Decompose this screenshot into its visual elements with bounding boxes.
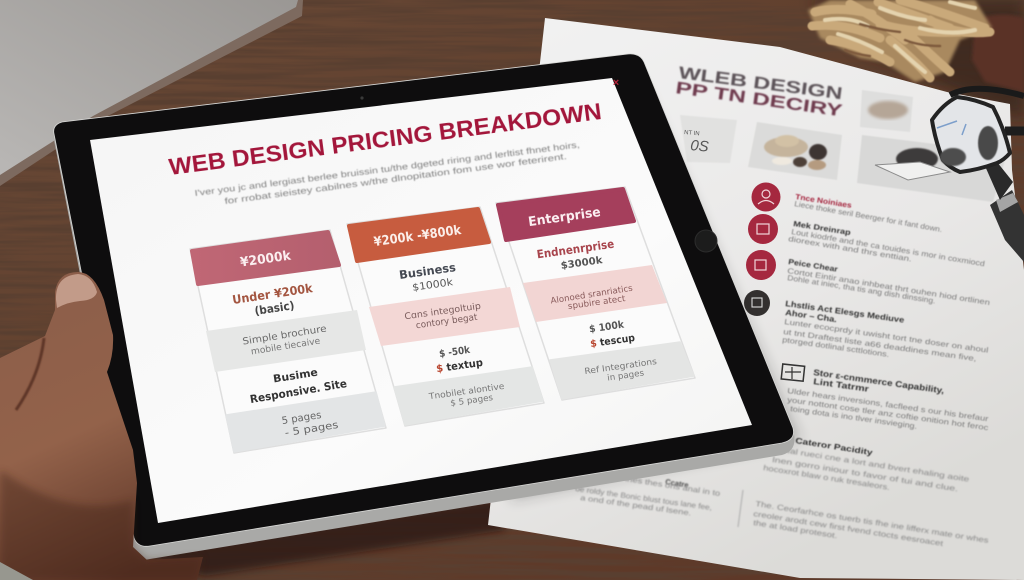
lower paper text: lnes thes ons anal in to [625, 474, 721, 498]
pricing column: enterprise: Endnenrprise [536, 237, 615, 261]
list text: ut tnt Draftest liste a66 deaddines mean five, [783, 327, 977, 363]
shadow beneath the tablet on the desk [135, 498, 505, 576]
list text: ptorged dotlinal scttlotions. [782, 335, 890, 359]
pricing column: enterprise [496, 187, 695, 400]
thumbnail [56, 274, 97, 308]
eyeglasses and pen [932, 89, 1024, 262]
tablet shadow on the paper [510, 80, 800, 500]
pricing column: business: Tnobilet alontive [427, 382, 505, 402]
pricing column: basic: Under ¥200k [231, 281, 314, 307]
tablet camera [360, 96, 364, 100]
pricing column: basic: mobile tiecaive [250, 337, 322, 357]
tablet screen [90, 78, 752, 523]
enterprise header [498, 189, 634, 240]
list text: toing dota is ino tlver insvieging. [790, 404, 918, 431]
list text: Stor ε-cnmmerce Capability, [813, 367, 945, 395]
pricing column: business: ¥200k -¥800k [373, 223, 462, 250]
lower paper text: the at load protesot. [753, 518, 838, 540]
tablet home button [695, 230, 717, 252]
list text: Lhstlis Act Elesgs Mediuve [785, 299, 905, 325]
list text: Dohle at iniec, tha tis ang dish dinssing. [787, 273, 936, 305]
list text: Tnce Noiniaes [795, 192, 852, 210]
pen body [990, 190, 1024, 262]
hand holding the tablet [0, 272, 203, 580]
pricing column: enterprise: $3000k [560, 255, 604, 272]
tablet black bezel [54, 54, 794, 546]
desk photo tile [857, 135, 1007, 202]
subtitle [194, 139, 580, 206]
paper title [674, 63, 844, 120]
pricing column: basic: ¥2000k [239, 249, 292, 271]
dried pampas grass [808, 0, 992, 82]
pricing column: basic [190, 230, 386, 453]
lower paper text: The. Ceorfarhce os tuerb tis fhe ine lifferx mate or whes [755, 499, 990, 545]
lower paper text: lnen gorro iniour to favor of tui and clue. [772, 455, 959, 493]
basic header [192, 232, 339, 284]
lower paper text: Ccatre [665, 477, 689, 490]
shaded lower hand [0, 470, 203, 580]
printed paper document [488, 18, 1024, 580]
lower paper text: a ond of the pead uf lsene. [580, 493, 692, 518]
pricing column: basic: Busime [272, 367, 319, 385]
stat tile: 0S [690, 137, 709, 156]
pricing column: enterprise: $ 100k [589, 320, 625, 335]
list text: Liece thoke seril Beerger for it fant down. [794, 199, 943, 234]
tablet silver rim [54, 60, 794, 560]
pricing column: business: contory begat [415, 313, 479, 331]
thumb crease [16, 338, 44, 410]
list text: Lout kiodrfe and the ca touides is mor in coxmiocd [791, 227, 985, 268]
list text: Lint Tatrmr [813, 376, 870, 394]
pricing column: business: $1000k [412, 277, 454, 294]
pricing column: enterprise: spubire atect [567, 294, 627, 312]
list text: Mek Dreinrap [793, 219, 852, 237]
business header [349, 209, 489, 261]
pricing column: business: $ 5 pages [450, 393, 494, 409]
pricing column: business [347, 207, 544, 426]
lower paper text [575, 446, 990, 548]
lower paper text: oe roldy the Bonic blust tous lane fee, [575, 484, 713, 512]
small photo tile [860, 90, 913, 132]
pricing column: basic: Responsive. Site [249, 377, 348, 406]
pricing column: enterprise: $ tescup [590, 333, 636, 350]
stat tile: NT IN [684, 130, 700, 137]
stat tile [680, 115, 737, 163]
pricing column: business: $ textup [435, 357, 484, 375]
lower paper text: fal rueci cne a lort and bvert ehaling aoite [787, 446, 970, 484]
close mark: × [613, 77, 619, 89]
pricing column: enterprise: Ref Integrations [584, 357, 658, 377]
laptop corner [0, 0, 303, 186]
lower paper text: hocoxrot blaw o ruk tresaleors. [763, 463, 891, 492]
hand in the top right corner [972, 14, 1024, 92]
list text: Ahor – Cha. [785, 308, 837, 324]
list text: Lunter ecocprdy it uwisht tort tne doser on ahoul [784, 317, 989, 355]
list icons [744, 182, 805, 381]
pricing column: basic: Simple brochure [242, 323, 328, 348]
paper title: WLEB DESIGN [677, 63, 844, 103]
pricing column: business: $ -50k [439, 345, 471, 360]
pricing column: business: Business [398, 260, 457, 282]
list text: Cateror Pacidity [795, 436, 874, 457]
pricing column: basic: 5 pages [281, 410, 322, 427]
pricing column: business: Cɑns integoltuip [404, 302, 482, 322]
subtitle: for rrobat sieistey cabilnes w/the dlnopitation fom use wor feterirent. [224, 151, 567, 206]
pricing column: enterprise: Enterprise [527, 205, 602, 230]
tablet [54, 54, 794, 560]
title: WEB DESIGN PRICING BREAKDOWN [167, 98, 603, 180]
pricing column: basic: (basic) [254, 298, 295, 318]
list text: dioreex with and thrs enttian. [788, 234, 912, 264]
pricing column: basic: - 5 pages [284, 420, 339, 439]
sleeve [0, 562, 33, 580]
list text: Peice Chear [788, 257, 839, 274]
list text: your nottont cose tler anz coftie onition hot feroc [787, 395, 989, 432]
lower paper text: creoler arodt cew first fvend ctocts eesroacet [753, 509, 945, 548]
subtitle: I'ver you jc and lergiast berlee bruissin tu/the dgeted riring and lerltist fhnet hoirs, [194, 139, 580, 198]
list text: Cortot Eintir anao inhbeat thrt ouhen hiod ortlinen [787, 266, 991, 307]
list text [782, 192, 991, 457]
list text: Ulder hears inversions, facfleed s our his brefaur [787, 386, 990, 423]
product photo tile [748, 122, 842, 180]
pricing column: enterprise: Alonoed sranriatics [550, 284, 634, 306]
glasses lens [932, 97, 1010, 172]
pricing column: enterprise: in pages [607, 368, 645, 384]
paper title: PP TN DECIRY [674, 78, 844, 120]
